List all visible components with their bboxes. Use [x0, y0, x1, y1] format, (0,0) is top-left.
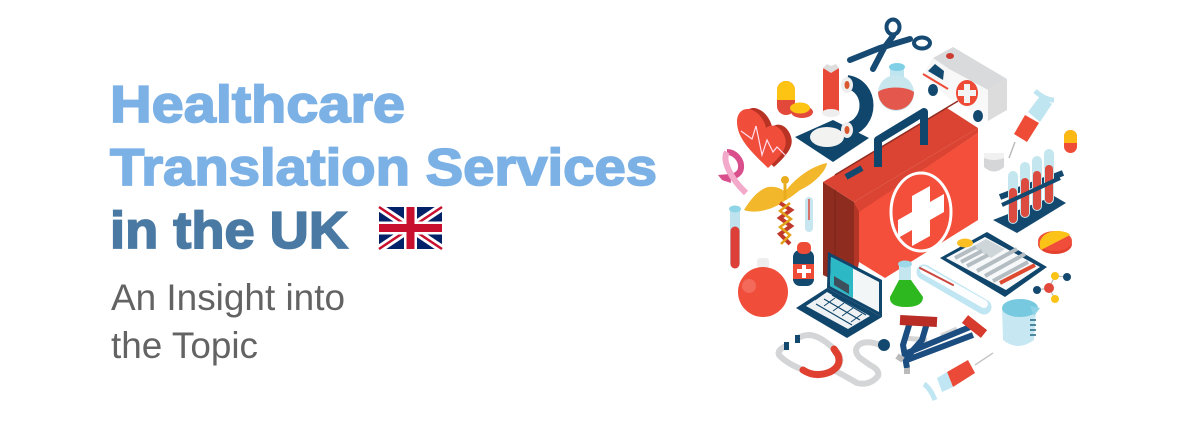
icon: heart: [737, 108, 792, 168]
icon: pink ribbon: [718, 152, 746, 193]
icon: caduceus: [744, 163, 827, 244]
subtitle: [111, 277, 345, 366]
icon: scissors: [850, 20, 930, 69]
icon: round flask: [878, 63, 914, 111]
icon: stethoscope: [779, 335, 890, 384]
icon: ambulance: [923, 47, 1007, 122]
case handle: [878, 112, 924, 167]
icon: small thermometer: [805, 197, 813, 232]
icon: lower syringe: [924, 353, 993, 400]
icon: pie chart: [1038, 231, 1072, 254]
icon: microscope: [795, 64, 869, 162]
subtitle: An Insight into: [111, 277, 345, 318]
icon: test tube rack: [993, 154, 1066, 233]
icon: first aid case: [823, 101, 978, 290]
icon: beaker: [1002, 299, 1040, 346]
icon: UK flag: [379, 207, 442, 249]
icon: medicine bottle: [793, 242, 814, 286]
icon: red round bottle: [738, 258, 788, 317]
subtitle: the Topic: [111, 325, 258, 366]
title: [110, 76, 657, 260]
icon: laptop: [796, 252, 882, 338]
icon: grey cup: [984, 153, 1004, 172]
icon: upper syringe: [1009, 91, 1054, 158]
icon: long thermometer: [920, 268, 984, 307]
title: Translation Services: [110, 139, 657, 197]
icon: small capsule: [1064, 130, 1077, 153]
icon: clipboard: [940, 232, 1047, 297]
icon: pills: [777, 81, 813, 118]
case emblem: [891, 173, 951, 251]
title: in the UK: [110, 202, 348, 260]
icon: crutches: [897, 319, 984, 374]
icon: green flask: [890, 260, 923, 307]
icon: left test tube: [729, 206, 741, 264]
title: Healthcare: [110, 76, 405, 134]
icon: molecule: [1033, 272, 1071, 303]
